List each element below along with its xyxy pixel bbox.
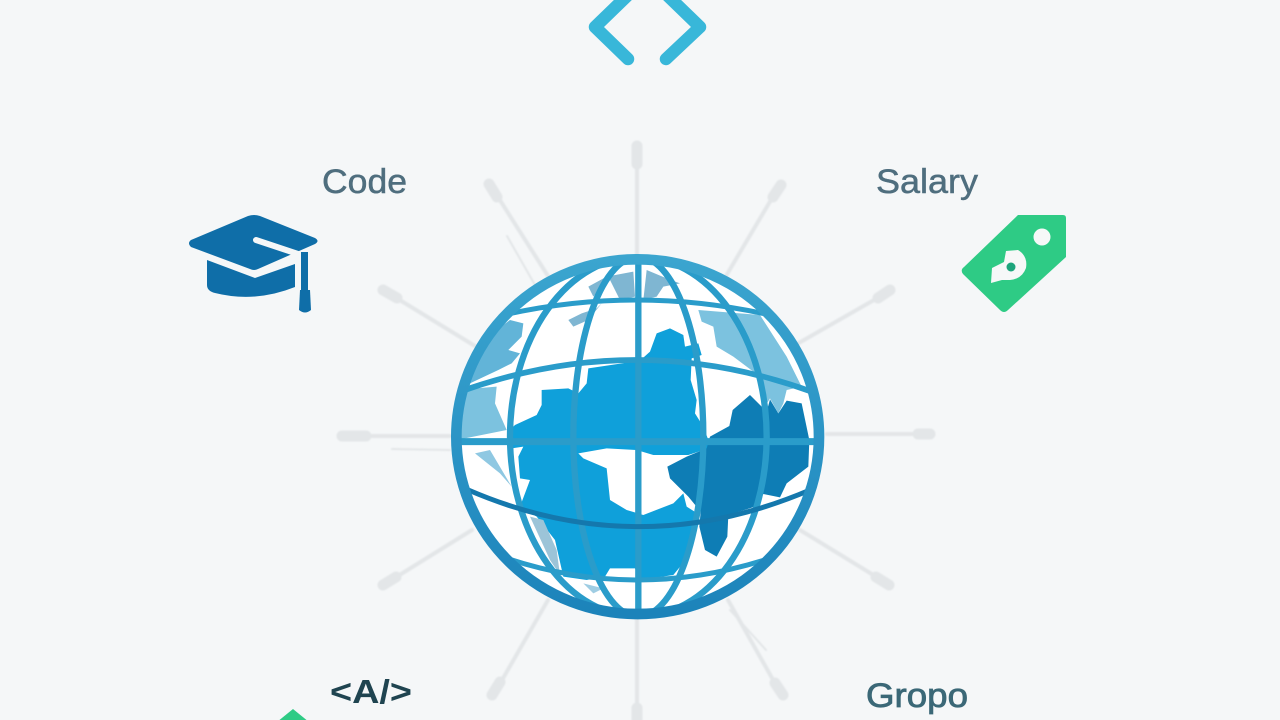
radiating connector lines [342,146,930,720]
icon: green price tag [962,215,1066,312]
globe [454,257,821,617]
label: Gropo: Gropo [866,677,968,715]
icon: graduation cap [189,215,318,312]
label: code tag: <A/> [330,673,412,710]
globe ocean disc [454,257,821,617]
label: Code: Code [322,163,407,201]
globe latitude and longitude grid [457,257,820,617]
globe outer ring [456,259,819,614]
globe landmasses [457,270,809,593]
icon: code chevrons [595,0,700,59]
icon: green marker cut off at bottom edge [277,709,309,720]
label: Salary: Salary [876,163,978,201]
